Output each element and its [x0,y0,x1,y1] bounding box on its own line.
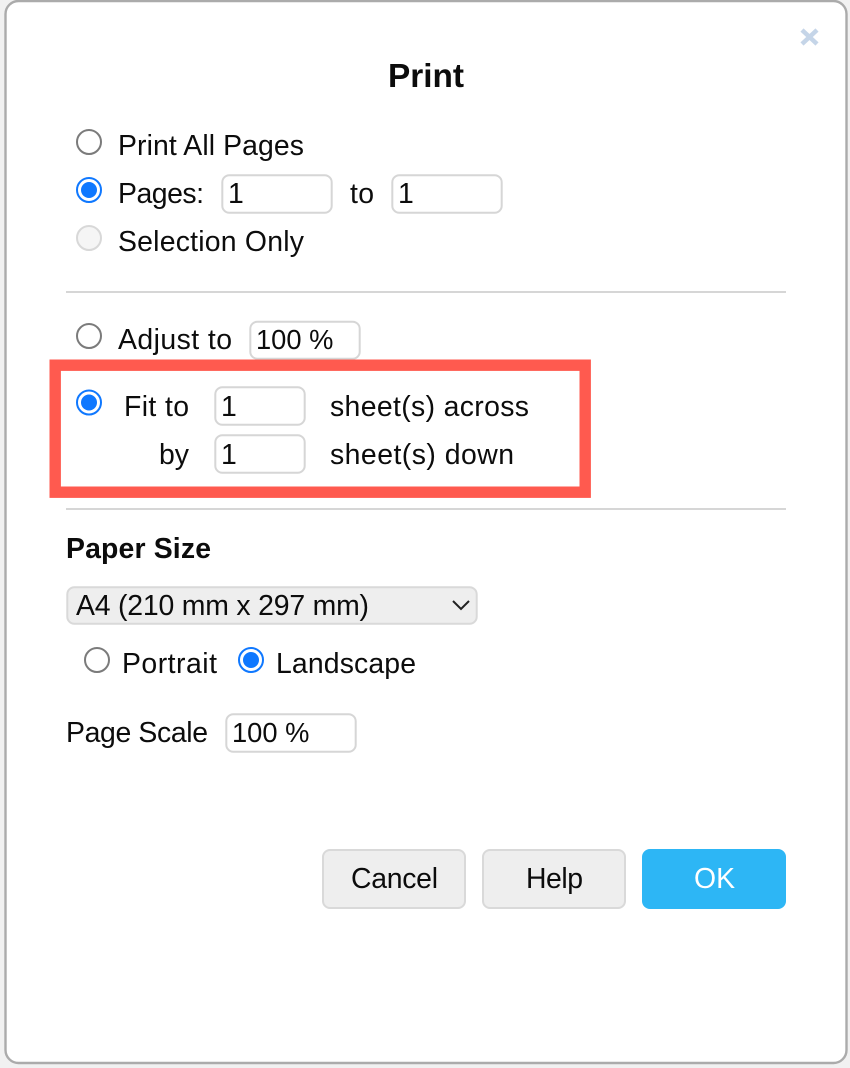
button: cancel [323,850,465,908]
scaling options [77,322,360,359]
input: sheets across [215,387,305,425]
select: paper size: A4 (210 mm x 297 mm) [76,590,369,622]
input: adjust percent: 100 % [256,324,333,355]
input: from page [222,175,332,213]
select: paper size [67,587,477,624]
button: ok: OK [694,863,735,895]
icon: close button [802,30,817,44]
button: cancel: Cancel [351,863,438,895]
page range options [77,130,502,258]
title: Print [388,58,464,95]
input: sheets down: 1 [221,439,237,471]
radio: fit to selected [77,390,189,423]
button: ok [642,849,786,909]
page scale: Page Scale [66,717,208,749]
label: by: by [159,439,190,471]
radio: selection only: Selection Only [118,226,305,258]
page scale [66,714,356,752]
radio: print all pages: Print All Pages [118,130,304,162]
radio: portrait: Portrait [122,648,217,680]
radio: pages selected [77,178,204,210]
input: from page: 1 [228,178,244,210]
button: help [483,850,625,908]
input: to page: 1 [398,178,414,210]
input: sheets down [215,435,305,473]
radio: landscape selected: Landscape [276,648,416,680]
heading: paper size: Paper Size [66,533,211,565]
input: to page [392,175,502,213]
red highlight box [55,365,585,492]
radio: fit to selected: Fit to [124,391,189,423]
page scale: 100 % [232,717,309,748]
orientation options [85,648,416,680]
radio: pages selected: Pages: [118,178,204,210]
button: help: Help [526,863,583,895]
radio: adjust to: Adjust to [118,324,232,356]
fit to options [77,387,529,473]
label: sheets down: sheet(s) down [330,439,514,471]
input: sheets across: 1 [221,391,237,423]
input: adjust percent [250,322,360,359]
label: sheets across: sheet(s) across [330,391,529,423]
label: to: to [350,178,374,210]
